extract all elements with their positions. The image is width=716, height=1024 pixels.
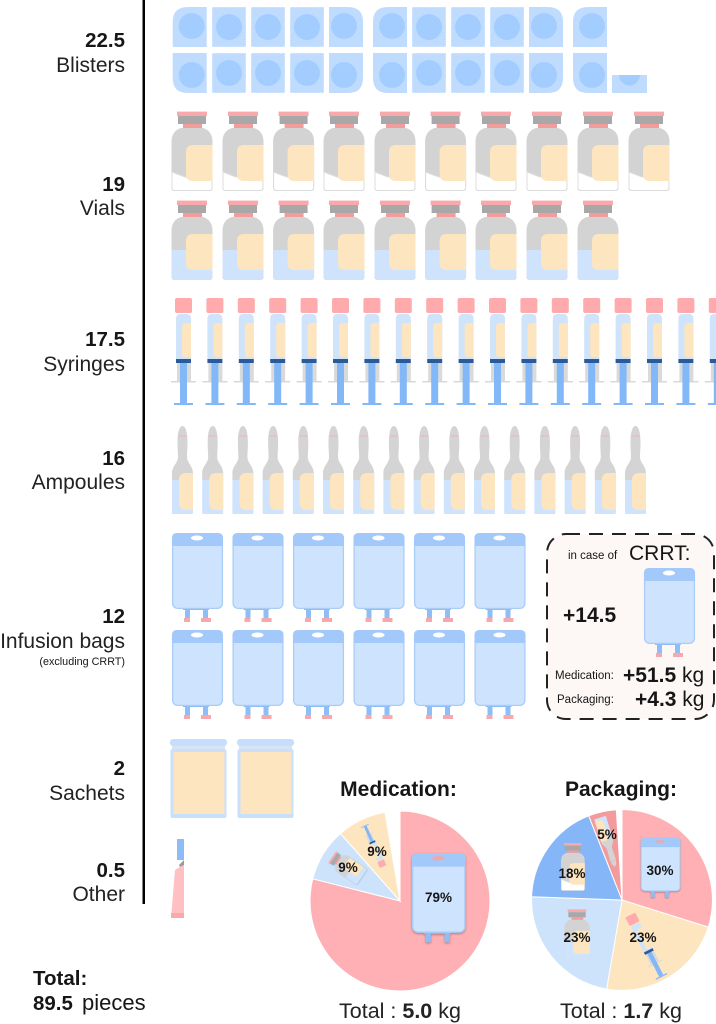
row label: blisters [56,29,125,77]
row label: sachets: 2 [114,757,125,780]
pie chart: medication [310,811,490,991]
row label: infusion bags [0,605,125,668]
row label: vials: 19 [102,173,125,196]
row label: other [72,859,125,906]
panel: CRRT callout: Packaging: [557,694,614,706]
value: syringes share: 9% [367,844,387,859]
icon: packaging vial (blister blue slice) [561,843,585,891]
panel: CRRT callout: CRRT: [629,542,690,565]
icon: packaging ampoule [594,816,621,868]
total: medication: Total : 5.0 kg [339,999,461,1023]
heading: medication: Medication: [340,778,457,801]
value: vials share: 23% [563,930,591,945]
row label: blisters: 22.5 [85,29,125,52]
pictogram row: blisters [173,7,647,93]
pictogram row: infusion bags [172,533,526,719]
value: bags share: 79% [425,890,452,905]
heading: packaging: Packaging: [565,778,677,801]
total: packaging: Total : 1.7 kg [560,999,682,1023]
row label: other: 0.5 [96,859,125,882]
value: vials share: 9% [338,860,358,875]
row label: ampoules [32,447,125,494]
pictogram row: vials [172,112,670,280]
row label: other: Other [72,883,125,906]
total pieces: 89.5 [33,992,73,1015]
row label: infusion bags: (excluding CRRT) [39,656,125,668]
panel: CRRT callout: +4.3 kg [635,688,704,711]
row label: infusion bags: 12 [102,605,125,628]
pictogram row: syringes [171,298,716,405]
row label: ampoules: Ampoules [32,471,125,494]
pictogram row: other [171,839,184,918]
row label: sachets: Sachets [49,782,125,805]
pictogram row: ampoules [172,426,646,514]
icon: medication bag [412,853,466,942]
value: bags share: 30% [646,863,674,878]
row label: vials: Vials [80,197,125,220]
row label: ampoules: 16 [102,447,125,470]
row label: syringes: 17.5 [85,328,125,351]
row label: sachets [49,757,125,805]
icon: packaging bag [641,838,680,898]
panel: CRRT callout: +51.5 kg [623,664,704,687]
icon: medication syringe [360,823,388,869]
icon: packaging vial (light blue slice) [564,909,590,960]
value: vials second share: 18% [558,866,586,881]
icon: packaging syringe [623,911,669,981]
row label: vials [80,173,125,220]
row label: syringes: Syringes [43,353,125,376]
pictogram row: sachets [170,739,294,818]
total pieces: pieces [82,990,146,1015]
row label: syringes [43,328,125,376]
panel: CRRT callout: in case of [568,550,618,562]
panel: CRRT callout: +14.5 [563,604,616,627]
row label: blisters: Blisters [56,54,125,77]
vertical axis [142,0,145,904]
icon: CRRT infusion bag [644,568,695,657]
total pieces: Total: [33,967,87,990]
icon: medication vial [327,849,367,885]
row label: infusion bags: Infusion bags [0,630,125,653]
panel: CRRT callout: Medication: [555,670,614,682]
pie chart: packaging [532,810,712,990]
total pieces [33,967,146,1015]
value: ampoules share: 5% [597,827,617,842]
value: syringes share: 23% [629,930,657,945]
panel: CRRT callout [547,534,714,719]
